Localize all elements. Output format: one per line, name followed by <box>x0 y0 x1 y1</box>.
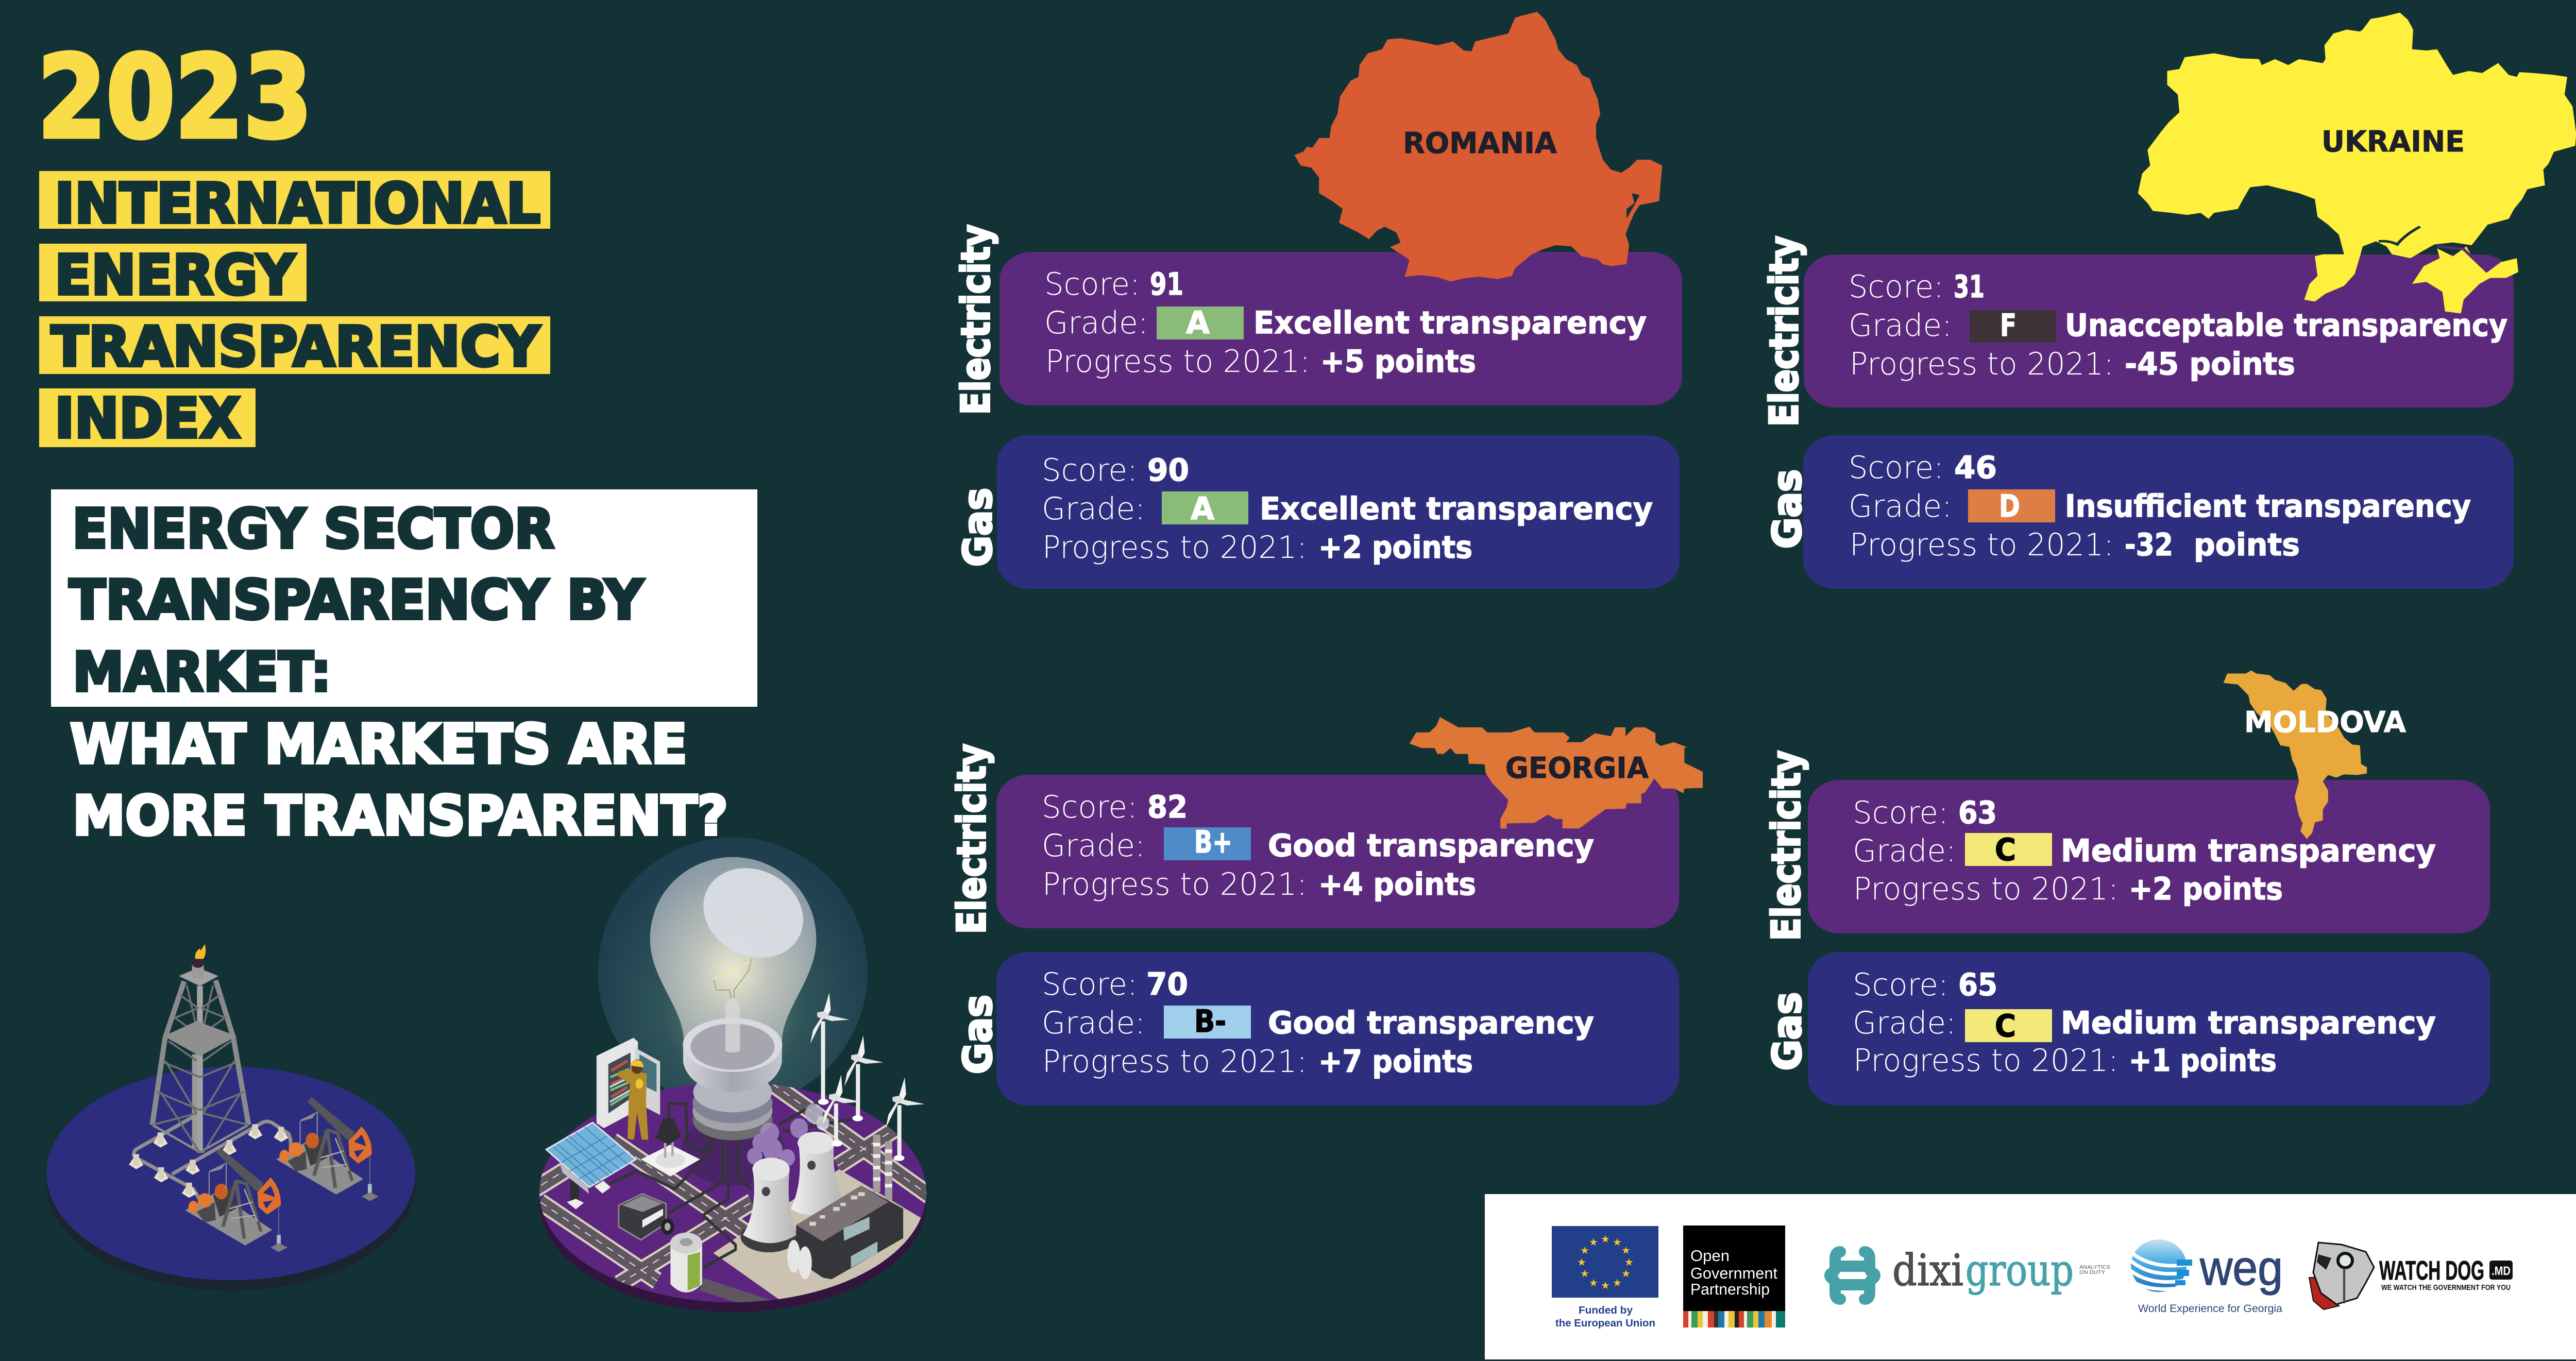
panel: Georgia gas: 70 <box>1146 966 1188 1002</box>
panel: Ukraine gas: D <box>1999 488 2020 524</box>
panel: Ukraine gas: 46 <box>1954 450 1997 486</box>
logo: weg <box>2128 1236 2283 1315</box>
chimneys <box>873 1135 892 1200</box>
panel: Georgia gas: Good transparency <box>1268 1005 1594 1041</box>
panel: Moldova electricity: Score: <box>1853 795 1948 831</box>
Ukraine section <box>1761 12 2576 589</box>
panel: Ukraine gas: points <box>2194 527 2300 563</box>
label: Electricity: Electricity <box>1763 751 1809 941</box>
panel: Georgia electricity: Score: <box>1042 789 1138 825</box>
panel: Moldova gas: C <box>1995 1008 2016 1044</box>
glow halo <box>598 838 868 1107</box>
panel: Georgia gas: Grade: <box>1042 1005 1145 1041</box>
panel: Georgia electricity: 82 <box>1147 789 1188 825</box>
panel: Georgia gas <box>996 952 1679 1105</box>
panel: Georgia gas: Score: <box>1042 966 1138 1002</box>
wind turbines <box>810 993 925 1161</box>
panel: Moldova electricity <box>1808 780 2490 933</box>
panel: Moldova electricity: C <box>1995 832 2016 868</box>
panel: Romania electricity: Grade: <box>1044 305 1148 341</box>
panel: Romania electricity: Progress to 2021: <box>1045 344 1310 380</box>
pumpjack rear <box>276 1097 379 1201</box>
logo: dixigroup: ON DUTY <box>2079 1270 2105 1275</box>
label: Gas: Gas <box>1764 469 1810 549</box>
illustration: oil derrick and pumpjacks on navy platform <box>46 944 415 1291</box>
panel: Georgia electricity: B+ <box>1194 824 1232 860</box>
panel: Ukraine electricity: Score: <box>1849 269 1944 305</box>
panel: Georgia gas: Progress to 2021: <box>1042 1044 1307 1080</box>
panel: Moldova electricity: Progress to 2021: <box>1853 871 2119 907</box>
panel: Georgia electricity: Grade: <box>1042 828 1145 864</box>
map: Moldova <box>2224 671 2406 839</box>
panel: Moldova electricity: Grade: <box>1853 833 1956 869</box>
map: Moldova: MOLDOVA <box>2244 706 2406 739</box>
logo: weg: World Experience for Georgia <box>2138 1303 2282 1315</box>
map: Ukraine: UKRAINE <box>2321 125 2465 159</box>
battery <box>670 1233 702 1292</box>
logo: dixigroup: group <box>1965 1245 2074 1296</box>
subtitle question: WHAT MARKETS ARE <box>70 713 687 776</box>
logo: Open Government Partnership: Open <box>1690 1247 1730 1265</box>
panel: Romania gas: Score: <box>1042 452 1138 488</box>
logo: EU flag: ★ <box>1621 1244 1631 1256</box>
panel: Romania gas <box>997 435 1680 589</box>
label: Gas: Gas <box>1764 992 1810 1070</box>
panel: Ukraine electricity: Grade: <box>1849 308 1952 344</box>
panel: Romania electricity: Score: <box>1044 266 1140 302</box>
logo: EU flag: the European Union <box>1555 1318 1655 1329</box>
map: Romania <box>1294 12 1663 281</box>
panel: Romania gas: Grade: <box>1042 491 1145 527</box>
subtitle white box: MARKET: <box>73 641 331 704</box>
plug and socket <box>641 1118 700 1177</box>
derrick tower <box>152 968 248 1153</box>
map: Romania: ROMANIA <box>1403 127 1557 160</box>
generator <box>619 1194 674 1240</box>
electrical cabinet <box>597 1038 660 1128</box>
logo: EU flag: ★ <box>1624 1256 1634 1268</box>
logo: dixigroup: dixi <box>1892 1245 1963 1296</box>
label: Gas: Gas <box>955 995 1001 1074</box>
logo: EU flag: ★ <box>1589 1277 1598 1289</box>
cables <box>610 1100 857 1268</box>
logo: EU flag: ★ <box>1613 1236 1622 1248</box>
logo: EU flag: ★ <box>1577 1256 1586 1268</box>
logo: Watch Dog: WE WATCH THE GOVERNMENT FOR YOU <box>2381 1283 2511 1292</box>
panel: Moldova electricity: Medium transparency <box>2061 833 2436 869</box>
Georgia section <box>948 717 1703 1105</box>
title line: TRANSPARENCY: TRANSPARENCY <box>51 315 540 379</box>
illustration: light bulb and energy city on purple platform <box>530 838 929 1312</box>
Romania section <box>953 12 1682 589</box>
pumpjack front <box>185 1148 287 1252</box>
panel: Ukraine gas: Progress to 2021: <box>1850 527 2114 563</box>
map: Georgia <box>1410 717 1703 828</box>
pipe supports <box>129 1124 289 1198</box>
logo: EU flag <box>1552 1226 1658 1329</box>
cooling towers <box>740 1132 842 1252</box>
logo: Watch Dog: WATCH DOG <box>2379 1256 2484 1286</box>
footer logo strip <box>1485 1194 2576 1359</box>
logo: Watch Dog <box>2309 1243 2513 1309</box>
panel: Romania gas: Excellent transparency <box>1260 491 1653 527</box>
label: Gas: Gas <box>955 488 1001 567</box>
panel: Ukraine gas <box>1803 435 2514 589</box>
light bulb <box>650 854 816 1141</box>
logo: EU flag: ★ <box>1601 1279 1610 1291</box>
label: Electricity: Electricity <box>948 744 994 934</box>
panel: Romania gas: A <box>1191 491 1215 527</box>
smoke <box>747 1103 829 1166</box>
label: Electricity: Electricity <box>953 225 998 415</box>
power plant building <box>787 1186 903 1279</box>
panel: Ukraine electricity: F <box>2000 308 2016 344</box>
Moldova section <box>1763 671 2490 1105</box>
panel: Moldova gas: Score: <box>1853 967 1948 1003</box>
panel: Ukraine electricity: 31 <box>1954 269 1985 305</box>
logo: EU flag: ★ <box>1621 1267 1631 1280</box>
panel: Moldova electricity: +2 points <box>2129 871 2283 907</box>
logo: EU flag: ★ <box>1580 1267 1589 1280</box>
panel: Moldova gas: Progress to 2021: <box>1853 1043 2119 1079</box>
logo: Open Government Partnership: Government <box>1690 1264 1777 1282</box>
panel: Romania electricity: +5 points <box>1320 344 1476 380</box>
panel: Georgia electricity: +4 points <box>1318 866 1476 903</box>
title line: INTERNATIONAL: INTERNATIONAL <box>55 172 540 236</box>
panel: Georgia gas: B- <box>1194 1003 1226 1040</box>
panel: Moldova gas: Grade: <box>1853 1005 1956 1041</box>
panel: Ukraine electricity: -45 points <box>2125 346 2295 382</box>
panel: Georgia electricity: Good transparency <box>1268 828 1594 864</box>
worker <box>617 1060 648 1139</box>
subtitle white box: ENERGY SECTOR <box>72 498 554 560</box>
subtitle question <box>70 713 728 847</box>
logo: weg: weg <box>2199 1240 2283 1296</box>
solar panel <box>546 1122 636 1210</box>
title line: INDEX: INDEX <box>55 387 241 451</box>
panel: Romania electricity: 91 <box>1150 266 1183 302</box>
panel: Romania electricity: Excellent transparency <box>1253 305 1647 341</box>
panel: Romania gas: 90 <box>1147 452 1189 488</box>
panel: Georgia gas: +7 points <box>1318 1044 1473 1080</box>
panel: Ukraine gas: Insufficient transparency <box>2065 488 2471 524</box>
panel: Georgia electricity <box>996 775 1679 928</box>
platform disc <box>530 1082 929 1312</box>
logo: Open Government Partnership: Partnership <box>1690 1280 1770 1298</box>
panel: Romania gas: Progress to 2021: <box>1042 530 1307 566</box>
panel: Moldova gas: 65 <box>1958 967 1997 1003</box>
panel: Ukraine gas: Score: <box>1849 450 1944 486</box>
subtitle white box <box>51 489 757 707</box>
logo: dixigroup <box>1830 1245 2110 1299</box>
panel: Moldova gas: Medium transparency <box>2061 1005 2436 1041</box>
panel: Ukraine electricity <box>1804 254 2514 407</box>
panel: Moldova gas: +1 points <box>2129 1043 2277 1079</box>
platform disc <box>46 1067 415 1291</box>
subtitle question: MORE TRANSPARENT? <box>73 785 728 847</box>
map: Georgia: GEORGIA <box>1505 752 1649 785</box>
year 2023: 2023 <box>38 31 312 163</box>
pipelines <box>134 1117 291 1199</box>
panel: Romania gas: +2 points <box>1318 530 1472 566</box>
panel: Georgia electricity: Progress to 2021: <box>1042 866 1307 903</box>
panel: Ukraine gas: Grade: <box>1849 488 1952 524</box>
panel: Ukraine gas: -32 <box>2125 527 2173 563</box>
panel: Ukraine electricity: Progress to 2021: <box>1850 346 2114 382</box>
title block <box>38 31 550 451</box>
logo: EU flag: ★ <box>1601 1233 1610 1245</box>
subtitle block <box>51 489 757 847</box>
title line: ENERGY: ENERGY <box>55 244 296 308</box>
logo: EU flag: ★ <box>1589 1236 1598 1248</box>
panel: Moldova electricity: 63 <box>1958 795 1997 831</box>
logo: EU flag: ★ <box>1580 1244 1589 1256</box>
panel: Ukraine electricity: Unacceptable transparency <box>2065 308 2507 344</box>
panel: Romania electricity: A <box>1186 305 1210 341</box>
logo: EU flag: Funded by <box>1579 1305 1633 1316</box>
flare stack <box>192 944 206 979</box>
panel: Romania electricity <box>999 252 1682 405</box>
subtitle white box: TRANSPARENCY BY <box>69 569 645 632</box>
map: Ukraine <box>2138 12 2576 313</box>
logo: EU flag: ★ <box>1613 1277 1622 1289</box>
logo: Watch Dog: .MD <box>2492 1264 2511 1278</box>
logo: dixigroup: ANALYTICS <box>2079 1265 2110 1270</box>
logo: Open Government Partnership <box>1683 1226 1785 1328</box>
panel: Moldova gas <box>1808 952 2490 1105</box>
label: Electricity: Electricity <box>1761 236 1807 427</box>
